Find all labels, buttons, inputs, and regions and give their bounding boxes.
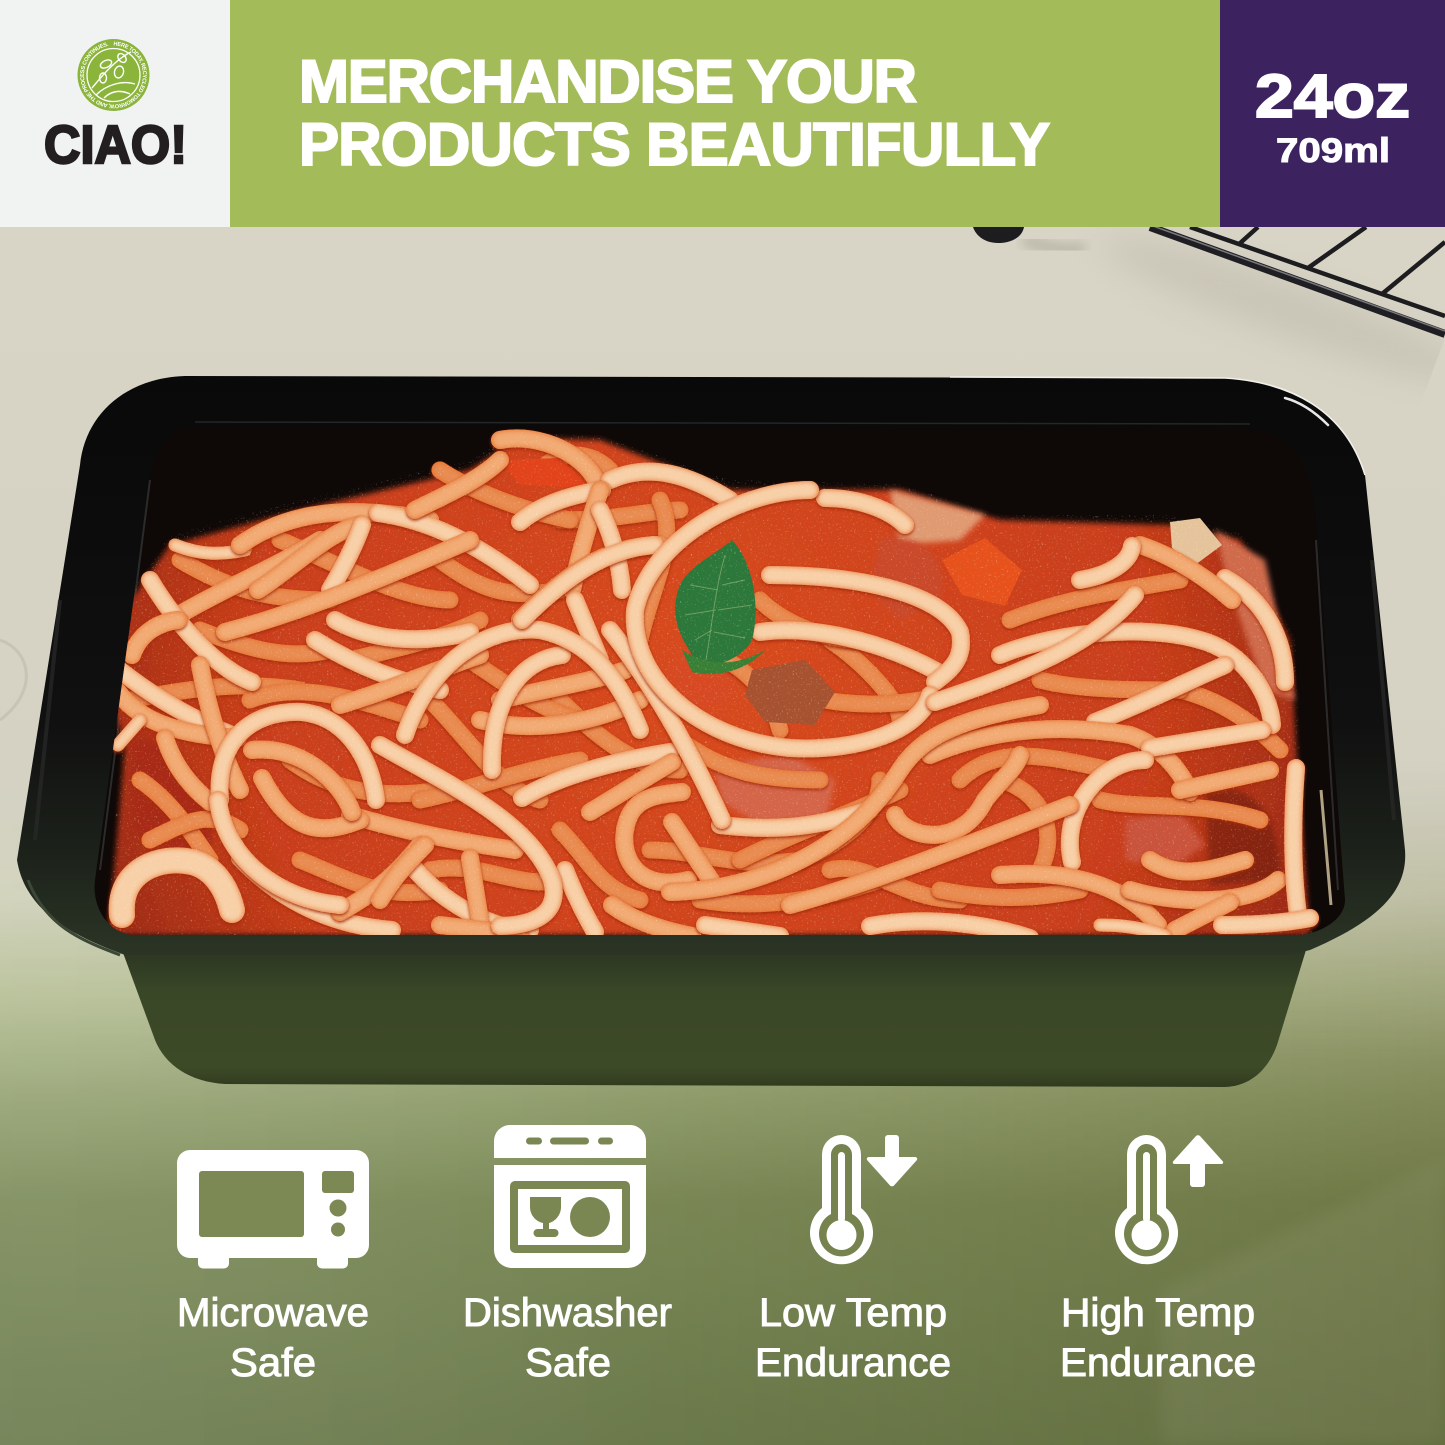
icon: dishwasher xyxy=(494,1125,646,1268)
header: headline panel xyxy=(230,0,1220,227)
headline xyxy=(299,48,1050,178)
size in millilitres: 709ml xyxy=(1276,132,1390,170)
food container xyxy=(17,376,1405,1087)
icon: thermometer with up arrow xyxy=(1115,1135,1223,1264)
label: Dishwasher xyxy=(463,1291,672,1335)
spaghetti with tomato sauce xyxy=(90,430,1330,940)
carrot and mushroom over the pasta xyxy=(500,458,1222,725)
headline: MERCHANDISE YOUR xyxy=(299,48,917,115)
sauce speckle xyxy=(90,430,1330,940)
logo wordmark: CIAO! xyxy=(44,115,187,175)
mint leaf xyxy=(675,540,765,674)
sauce base xyxy=(95,438,1310,935)
label: Endurance xyxy=(1060,1341,1256,1385)
label: Endurance xyxy=(755,1341,951,1385)
label xyxy=(1060,1291,1256,1385)
label: High Temp xyxy=(1061,1291,1255,1335)
header: logo panel xyxy=(0,0,230,227)
label: Safe xyxy=(525,1341,611,1385)
meat chunks and carrot xyxy=(715,490,1295,870)
icon: microwave xyxy=(177,1150,369,1268)
label: Safe xyxy=(230,1341,316,1385)
feature: low temp endurance xyxy=(755,1135,951,1385)
container body xyxy=(122,950,1306,1087)
container rim xyxy=(17,376,1405,955)
header: size panel xyxy=(1220,0,1445,227)
icon: thermometer with down arrow xyxy=(810,1135,917,1264)
feature: high temp endurance xyxy=(1060,1135,1256,1385)
label: Low Temp xyxy=(759,1291,947,1335)
cooling rack in the background xyxy=(973,226,1445,334)
underlying pasta strands xyxy=(130,455,1280,904)
pasta strands xyxy=(95,438,1310,938)
label xyxy=(755,1291,951,1385)
size in ounces: 24oz xyxy=(1255,62,1410,130)
feature: microwave safe xyxy=(177,1150,369,1385)
label: Microwave xyxy=(177,1291,369,1335)
feature: dishwasher safe xyxy=(463,1125,672,1385)
label xyxy=(177,1291,369,1385)
container interior xyxy=(95,427,1345,935)
headline: PRODUCTS BEAUTIFULLY xyxy=(299,111,1050,178)
label xyxy=(463,1291,672,1385)
logo badge: HERE TODAY, RECYCLED TOMORROW, AND THE PROCESS CONTINUES. xyxy=(80,42,147,108)
